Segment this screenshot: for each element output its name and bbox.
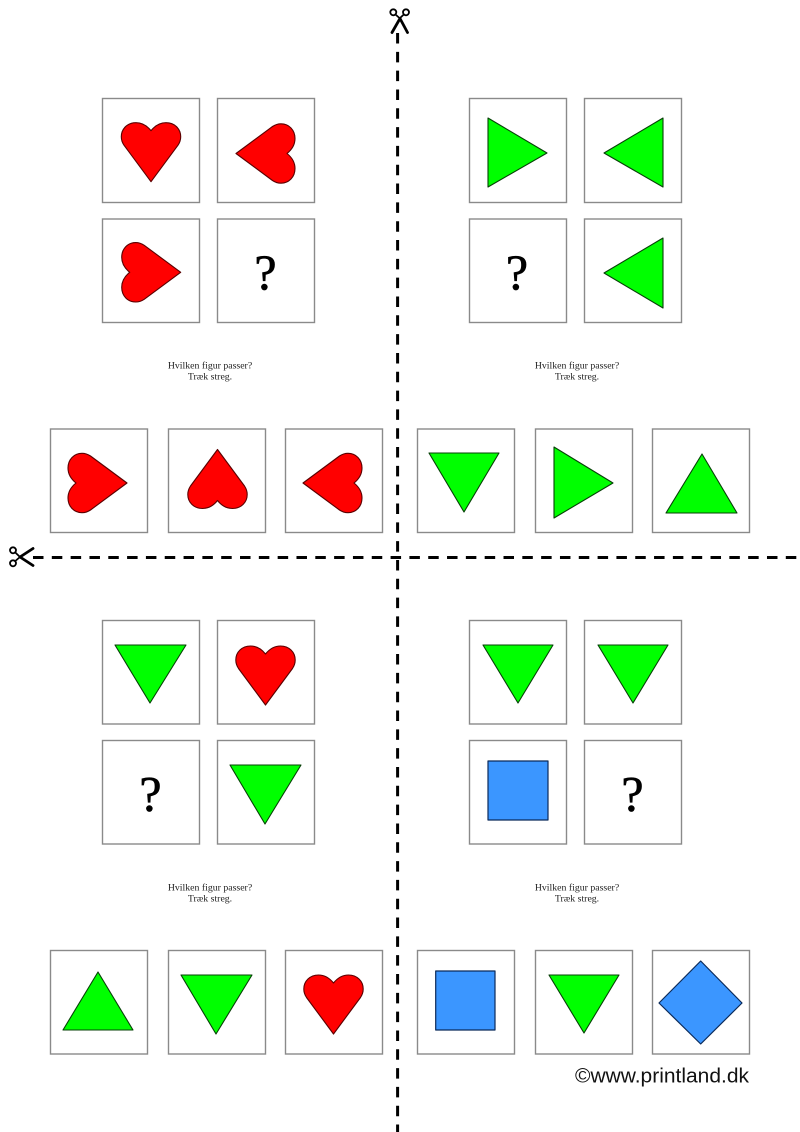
instruction text: Hvilken figur passer? bbox=[535, 882, 619, 894]
tile: blue square bbox=[470, 740, 566, 844]
icon: scissors on horizontal line bbox=[10, 547, 33, 566]
answer: heart pointing down bbox=[286, 950, 382, 1054]
icon: scissors on vertical line bbox=[390, 9, 409, 33]
tile: heart pointing down bbox=[218, 620, 314, 724]
answer: heart pointing up bbox=[168, 429, 266, 532]
instruction text: Træk streg. bbox=[555, 372, 599, 382]
answer: blue diamond bbox=[652, 950, 750, 1054]
tile: question mark bbox=[102, 740, 200, 844]
answer: heart pointing right bbox=[50, 429, 148, 532]
panel: bottom-right puzzle bbox=[418, 620, 750, 1054]
tile: triangle pointing down bbox=[102, 620, 200, 724]
tile: question mark: ? bbox=[139, 766, 162, 822]
answer: triangle pointing up bbox=[652, 429, 750, 532]
instruction text: Hvilken figur passer? bbox=[535, 360, 619, 372]
answer: triangle pointing right bbox=[536, 429, 632, 532]
vertical cut line bbox=[396, 33, 399, 1132]
tile: question mark: ? bbox=[621, 766, 644, 822]
answer: triangle pointing down bbox=[536, 950, 632, 1054]
tile: heart pointing left bbox=[218, 98, 314, 202]
tile: triangle pointing down bbox=[470, 620, 566, 724]
instruction text: Træk streg. bbox=[555, 894, 599, 904]
panel: bottom-left puzzle bbox=[50, 620, 382, 1054]
tile: question mark bbox=[584, 740, 682, 844]
tile: triangle pointing right bbox=[470, 98, 566, 202]
answer: triangle pointing down bbox=[418, 429, 514, 532]
tile: question mark bbox=[470, 219, 566, 322]
tile: question mark bbox=[218, 219, 314, 322]
tile: heart pointing right bbox=[102, 219, 200, 322]
panel: top-left puzzle bbox=[50, 98, 382, 532]
instruction text: Træk streg. bbox=[188, 894, 232, 904]
horizontal cut line bbox=[33, 556, 800, 559]
tile: question mark: ? bbox=[254, 244, 277, 300]
answer: heart pointing left bbox=[286, 429, 382, 532]
instruction text: Hvilken figur passer? bbox=[168, 882, 252, 894]
tile: question mark: ? bbox=[506, 244, 528, 300]
tile: triangle pointing left bbox=[584, 98, 682, 202]
copyright text: ©www.printland.dk bbox=[575, 1064, 750, 1088]
tile: triangle pointing left bbox=[584, 219, 682, 322]
answer: blue square bbox=[418, 950, 514, 1054]
panel: top-right puzzle bbox=[418, 98, 750, 532]
instruction text: Træk streg. bbox=[188, 372, 232, 382]
instruction text: Hvilken figur passer? bbox=[168, 360, 252, 372]
tile: heart pointing down bbox=[102, 98, 200, 202]
answer: triangle pointing down bbox=[168, 950, 266, 1054]
tile: triangle pointing down bbox=[218, 740, 314, 844]
tile: triangle pointing down bbox=[584, 620, 682, 724]
answer: triangle pointing up bbox=[50, 950, 148, 1054]
